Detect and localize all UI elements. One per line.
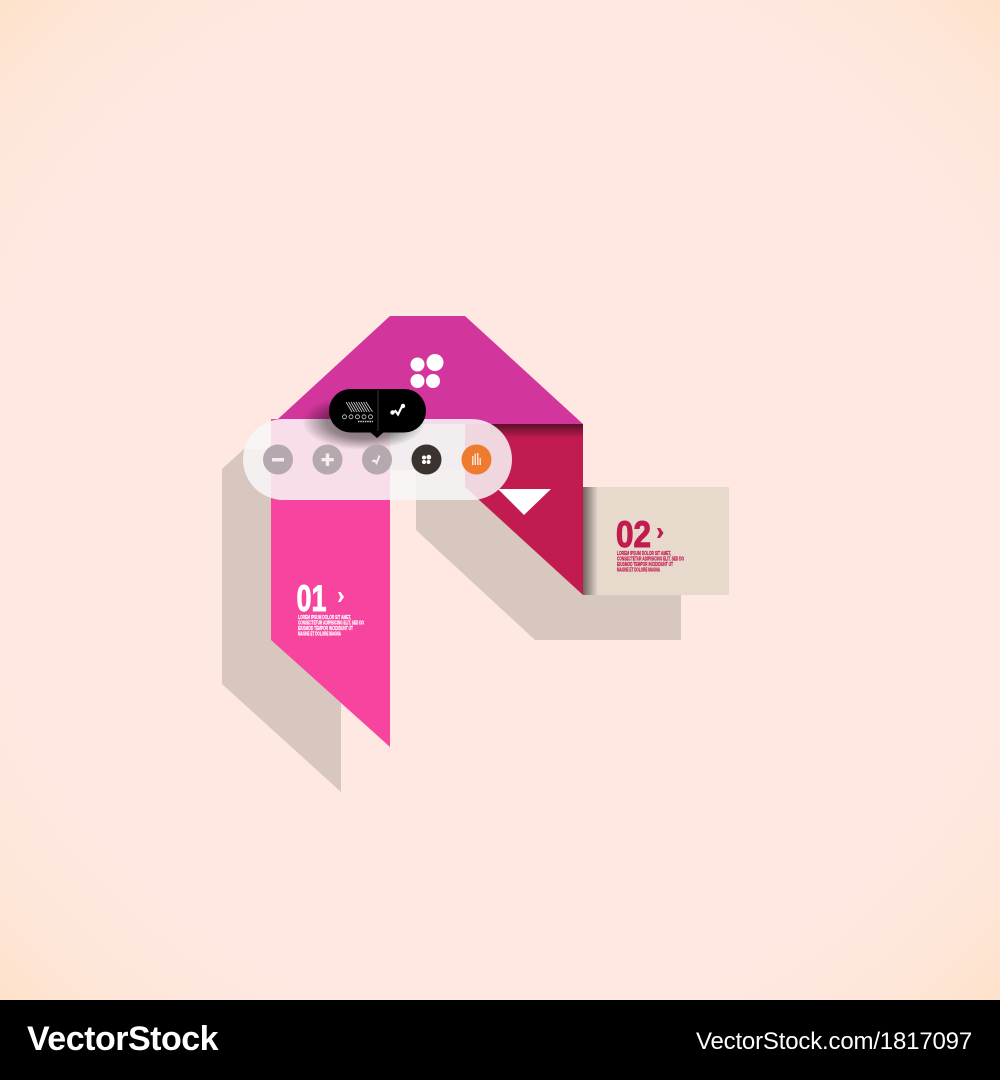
panel: crimson fold — [465, 424, 583, 595]
panel: pink ribbon step 01 — [271, 419, 390, 747]
step 01 text — [296, 578, 364, 638]
description 02: CONSECTETUR ADIPISICING ELIT, SED DO — [617, 556, 684, 562]
icon: plus button — [312, 444, 342, 474]
tooltip: black bubble — [329, 389, 426, 438]
panel: step 02 beige card — [583, 487, 729, 595]
icon: minus button — [263, 444, 293, 474]
back fold under pill — [390, 424, 465, 470]
number 01: 01 — [296, 578, 326, 619]
footer bar — [0, 1000, 1000, 1080]
icon: four white dots — [410, 354, 444, 388]
watermark brand: VectorStock — [27, 1020, 218, 1058]
panel: translucent button pill — [243, 419, 512, 500]
icon: hatch and circles — [342, 402, 373, 422]
step 02 text — [616, 514, 684, 574]
chevron 02 — [657, 528, 664, 538]
panel: magenta roof — [278, 316, 583, 424]
right ribbon shadow — [416, 470, 681, 640]
left ribbon shadow — [222, 449, 341, 792]
card fold shadow — [583, 487, 598, 595]
icon: white chart line — [390, 404, 405, 415]
description 01 — [298, 615, 364, 638]
icon: dots button — [412, 444, 442, 474]
icon: chart line button — [362, 444, 392, 474]
crimson fold top shadow — [490, 424, 583, 438]
icon: bars button — [462, 444, 492, 474]
tooltip shadow — [302, 394, 426, 450]
description 01: MAGNE ET DOLORE MAGNA — [298, 632, 341, 638]
watermark url: VectorStock.com/1817097 — [696, 1028, 972, 1055]
description 02 — [617, 551, 684, 574]
description 02: MAGNE ET DOLORE MAGNA — [617, 568, 660, 574]
chevron 01 — [338, 592, 344, 602]
number 02: 02 — [616, 514, 651, 555]
description 02: EIUSMOD TEMPOR INCIDIDUNT UT — [617, 562, 673, 568]
description 01: CONSECTETUR ADIPISICING ELIT, SED DO — [298, 620, 364, 626]
description 01: LOREM IPSUM DOLOR SIT AMET, — [298, 615, 351, 621]
icon: white triangle — [498, 489, 551, 515]
description 02: LOREM IPSUM DOLOR SIT AMET, — [617, 551, 671, 557]
description 01: EIUSMOD TEMPOR INCIDIDUNT UT — [298, 626, 353, 632]
